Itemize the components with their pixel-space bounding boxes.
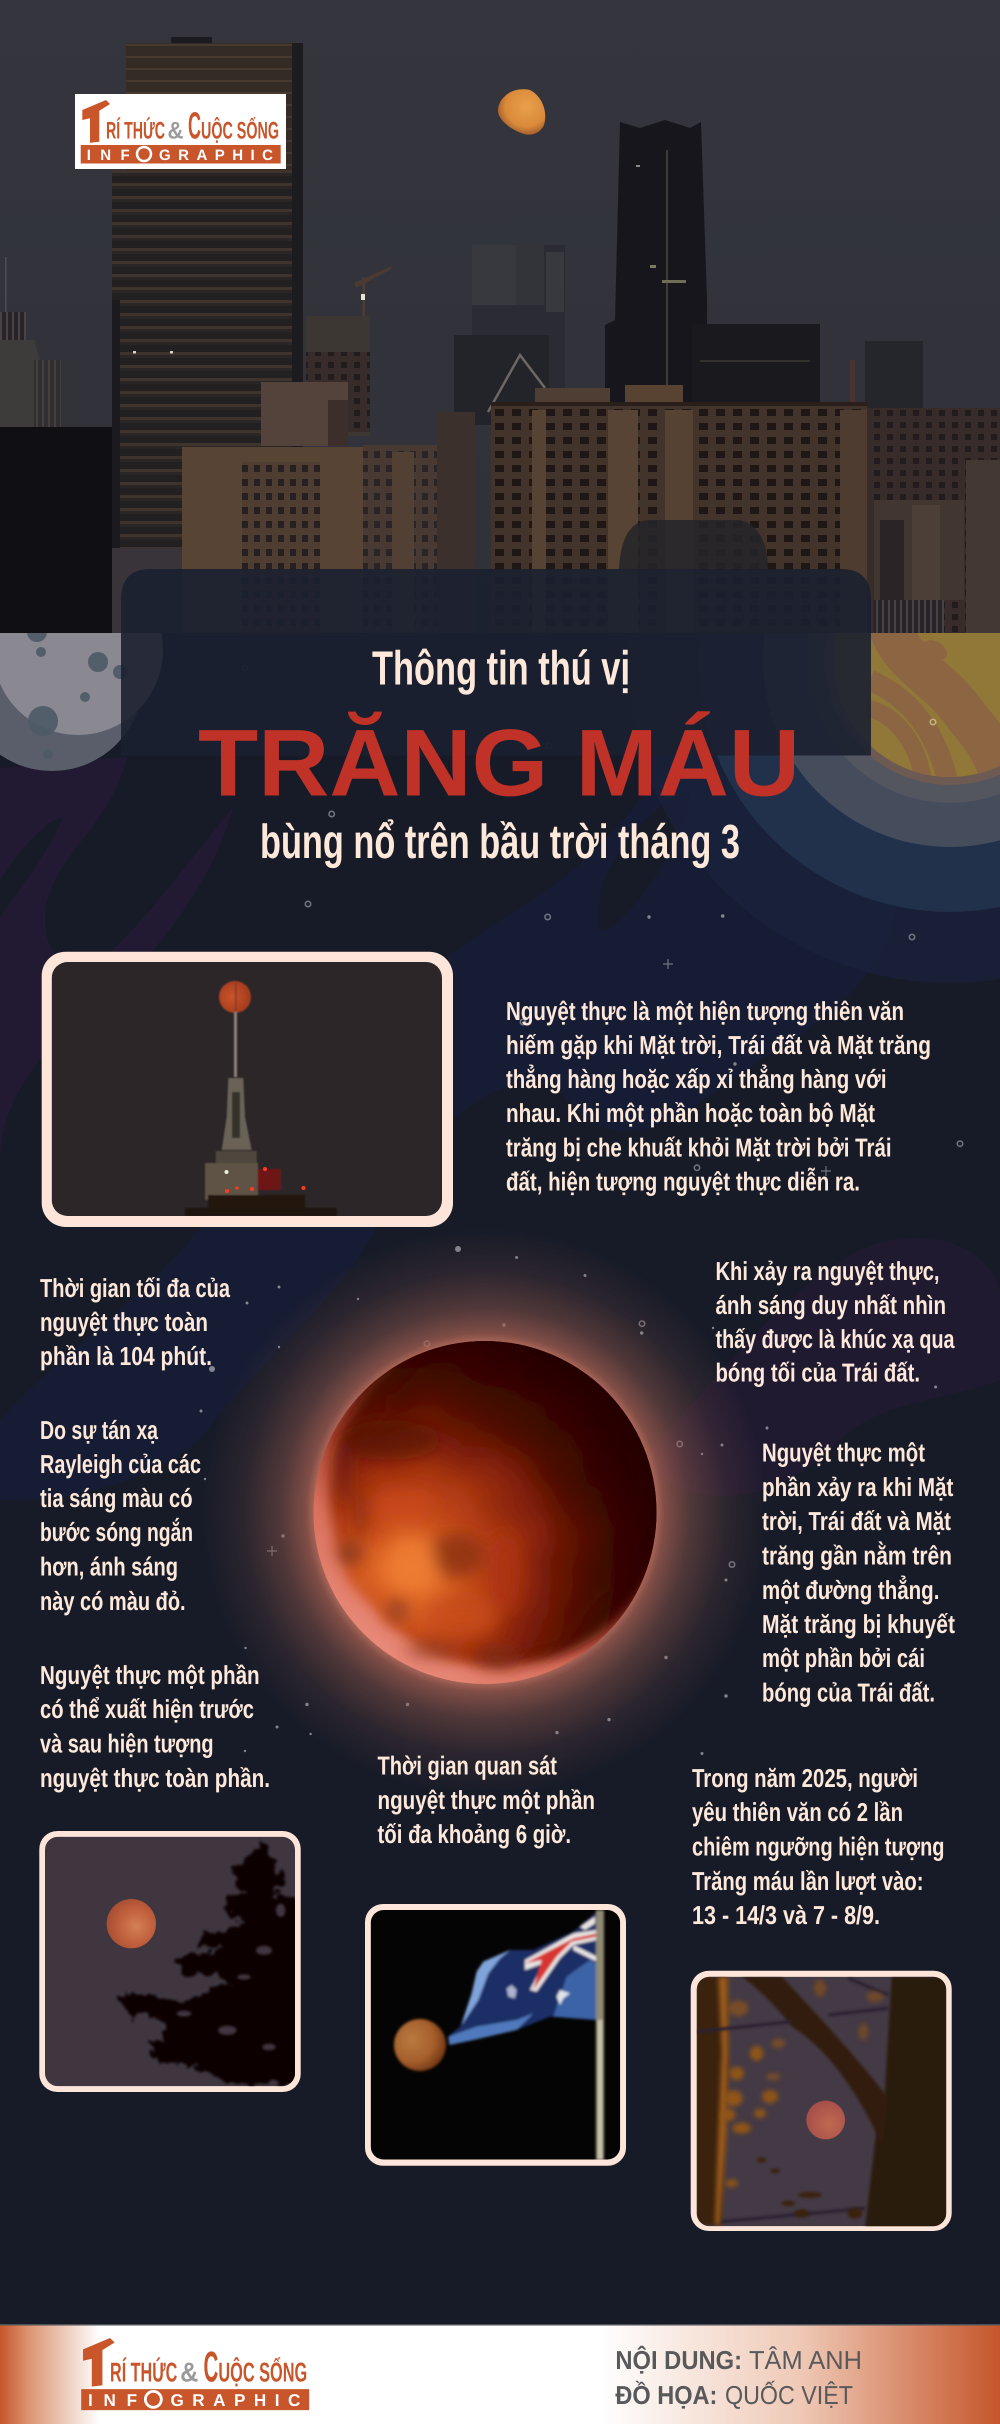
logo: footer: C [204,2344,218,2392]
brown apartment block centre [491,385,867,582]
photo: moon and Australian flag [365,1904,626,2166]
logo: footer: UỘC SỐNG [218,2357,307,2388]
stars [200,665,963,1755]
text: lunar eclipse intro: thẳng hàng hoặc xấp xỉ thẳng hàng với [506,1064,886,1094]
big left skyscraper [112,37,303,570]
logo: top: UỘC SỐNG [201,116,279,144]
planet rings: top right [651,633,1000,983]
planet: top left moon [0,565,163,771]
brown apartment block left [112,382,475,570]
footer band [0,2324,1000,2424]
text: Rayleigh scattering: hơn, ánh sáng [40,1552,178,1582]
credits: ĐỒ HỌA: [615,2380,717,2410]
text: lunar eclipse intro: nhau. Khi một phần hoặc toàn bộ Mặt [506,1098,875,1128]
text: partial eclipse definition: trăng gần nằm trên [762,1540,952,1570]
text: maximum totality: nguyệt thực toàn [40,1307,208,1337]
text: partial eclipse definition: Mặt trăng bị khuyết [762,1609,955,1639]
text: refracted light [716,1256,955,1388]
dark block lower left [0,427,112,633]
text: Rayleigh scattering: bước sóng ngắn [40,1517,193,1547]
text: partial observation time: tối đa khoảng 6 giờ. [378,1819,571,1849]
text: 2025 dates: Trăng máu lần lượt vào: [692,1866,924,1896]
credits: TÂM ANH [749,2345,862,2375]
text: lunar eclipse intro: Nguyệt thực là một hiện tượng thiên văn [506,996,904,1026]
text: lunar eclipse intro [506,996,931,1196]
logo: top: C [188,106,201,148]
logo: top: RÍ THỨC [106,116,165,144]
text: Rayleigh scattering: tia sáng màu có [40,1483,193,1513]
crane and back building [306,266,392,436]
text: partial eclipse definition: một đường thẳng. [762,1575,939,1605]
text: partial observation time: Thời gian quan sát [378,1751,557,1781]
text: Rayleigh scattering: này có màu đỏ. [40,1586,186,1616]
text: 2025 dates: yêu thiên văn có 2 lần [692,1797,903,1827]
logo: top [75,94,286,169]
photo: moon and pine tree [39,1831,301,2092]
credits [615,2345,862,2410]
photo: moon through tree branches [691,1971,952,2231]
text: maximum totality: phần là 104 phút. [40,1341,212,1371]
text: maximum totality [40,1273,230,1371]
logo: footer: GRAPHIC [170,2391,301,2411]
text: lunar eclipse intro: đất, hiện tượng nguyệt thực diễn ra. [506,1166,860,1196]
background swirls [0,755,1000,1500]
text: partial eclipse definition: trời, Trái đất và Mặt [762,1506,951,1536]
heading: main title: TRĂNG MÁU [198,710,800,816]
tall dark tower on the right [605,120,707,420]
logo: footer [81,2338,309,2411]
text: refracted light: Khi xảy ra nguyệt thực, [716,1256,940,1286]
moon over the city [498,89,545,135]
text: partial observation time: nguyệt thực một phần [378,1785,595,1815]
text: partial observation time [378,1751,595,1849]
translucent title panel [121,569,871,756]
dome [619,520,768,570]
logo: footer: RÍ THỨC [110,2357,177,2388]
text: partial eclipse definition: Nguyệt thực một [762,1438,925,1468]
logo: top: GRAPHIC [159,147,273,164]
central blood moon [200,1228,770,1798]
credits: QUỐC VIỆT [725,2380,853,2410]
text: partial eclipse definition [762,1438,955,1708]
text: Rayleigh scattering: Do sự tán xạ [40,1415,158,1445]
text: 2025 dates: 13 - 14/3 và 7 - 8/9. [692,1900,880,1930]
text: refracted light: ánh sáng duy nhất nhìn [716,1290,946,1320]
text: refracted light: bóng tối của Trái đất. [716,1358,920,1388]
logo: top: & [168,117,184,144]
text: lunar eclipse intro: trăng bị che khuất khỏi Mặt trời bởi Trái [506,1132,892,1162]
text: partial eclipse definition: phần xảy ra khi Mặt [762,1472,954,1502]
logo: top: INF [87,147,130,164]
text: partial before and after: có thể xuất hiện trước [40,1694,254,1724]
text: 2025 dates [692,1763,944,1930]
text: partial before and after [40,1660,270,1793]
text: Rayleigh scattering [40,1415,201,1616]
credits: NỘI DUNG: [615,2345,742,2375]
left distant buildings [0,257,61,428]
logo: footer: INF [88,2391,137,2411]
text: partial eclipse definition: một phần bởi cái [762,1643,925,1673]
text: partial before and after: nguyệt thực toàn phần. [40,1763,270,1793]
photo: Empire State spire with blood moon [42,952,453,1227]
logo: footer: & [180,2358,198,2388]
heading: line 1: Thông tin thú vị [372,642,630,696]
grey mid tower [454,245,565,425]
text: partial before and after: và sau hiện tượng [40,1729,214,1759]
right buildings [867,408,1000,633]
text: partial eclipse definition: bóng của Trái đất. [762,1678,935,1708]
text: 2025 dates: Trong năm 2025, người [692,1763,918,1793]
text: maximum totality: Thời gian tối đa của [40,1273,230,1303]
text: Rayleigh scattering: Rayleigh của các [40,1449,201,1479]
glow around moon [200,1228,770,1798]
text: partial before and after: Nguyệt thực một phần [40,1660,260,1690]
header photo: city skyline at night with moon [0,0,1000,633]
heading: line 3: bùng nổ trên bầu trời tháng 3 [260,816,740,869]
title block [198,642,800,869]
dark block and far right tower [700,324,923,408]
